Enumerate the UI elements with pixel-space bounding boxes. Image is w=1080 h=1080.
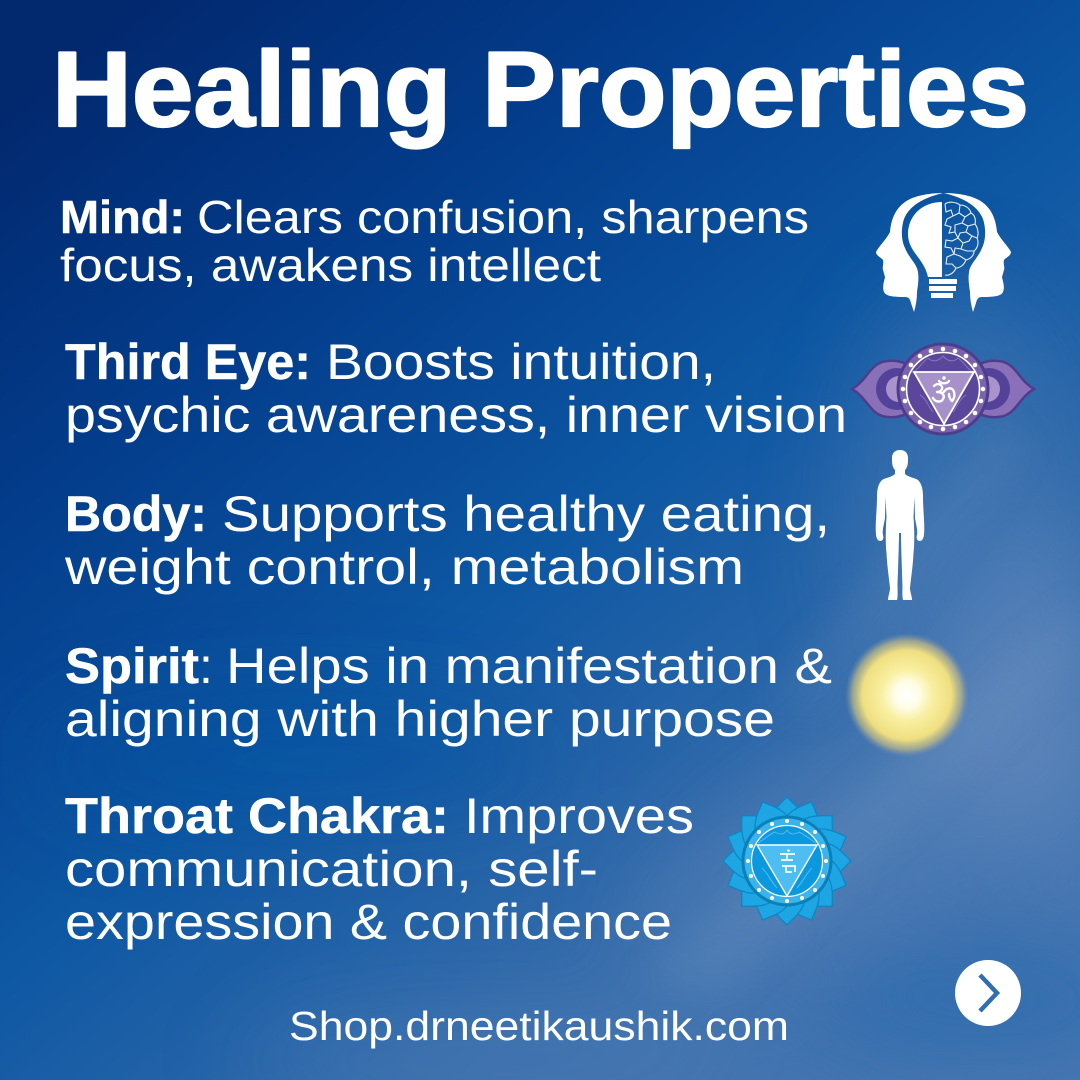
text block: Mind: focus, awakens intellect (60, 239, 601, 291)
petals (721, 795, 853, 927)
text block: Mind (60, 191, 809, 291)
text block: Throat Chakra: expression & confidence (65, 894, 672, 950)
ring dots (901, 347, 985, 431)
icon: throat chakra (721, 795, 853, 927)
text block: Throat Chakra: communication, self- (65, 841, 598, 897)
text block: Third Eye: psychic awareness, inner vision (65, 387, 847, 443)
text block: Spirit: Spirit (65, 638, 199, 694)
text block: Third Eye: Third Eye: (65, 334, 311, 390)
triangle (914, 372, 974, 424)
icon: glowing sun (845, 633, 969, 757)
icon: human body silhouette (876, 450, 924, 600)
title: Healing Properties (52, 29, 1029, 149)
icon: heads with light bulb and brain (876, 193, 1011, 312)
text block: Throat Chakra (65, 788, 694, 950)
footer url: Shop.drneetikaushik.com (289, 1003, 789, 1049)
ring dots (746, 819, 828, 903)
bija symbol (780, 854, 795, 872)
text block: Spirit: aligning with higher purpose (65, 691, 775, 747)
text block: Body: weight control, metabolism (64, 539, 744, 595)
text block: Mind: Mind: (60, 191, 185, 243)
inner lotus pattern (758, 830, 816, 888)
om symbol (933, 381, 954, 402)
text block: Body: Supports healthy eating, (222, 486, 830, 542)
icon: third eye chakra (852, 344, 1034, 434)
petals (852, 361, 912, 417)
brain (945, 202, 978, 275)
text block: Spirit: : (199, 638, 213, 694)
text block: Throat Chakra: Throat Chakra: (65, 788, 449, 844)
text block: Spirit (65, 638, 832, 747)
text block: Body: Body: (65, 486, 207, 542)
bulb left half (908, 202, 942, 277)
triangle (757, 845, 817, 896)
text block: Body (64, 486, 830, 595)
text block: Third Eye (65, 334, 847, 443)
disc (898, 344, 988, 434)
bulb base bars (929, 279, 957, 284)
text block: Mind: Clears confusion, sharpens (197, 191, 809, 243)
ring and disc (743, 817, 831, 905)
text block: Throat Chakra: Improves (464, 788, 694, 844)
text block: Third Eye: Boosts intuition, (326, 334, 716, 390)
inner lotus pattern (912, 356, 974, 412)
text block: Spirit: Helps in manifestation & (226, 638, 832, 694)
arrow button (955, 960, 1021, 1026)
